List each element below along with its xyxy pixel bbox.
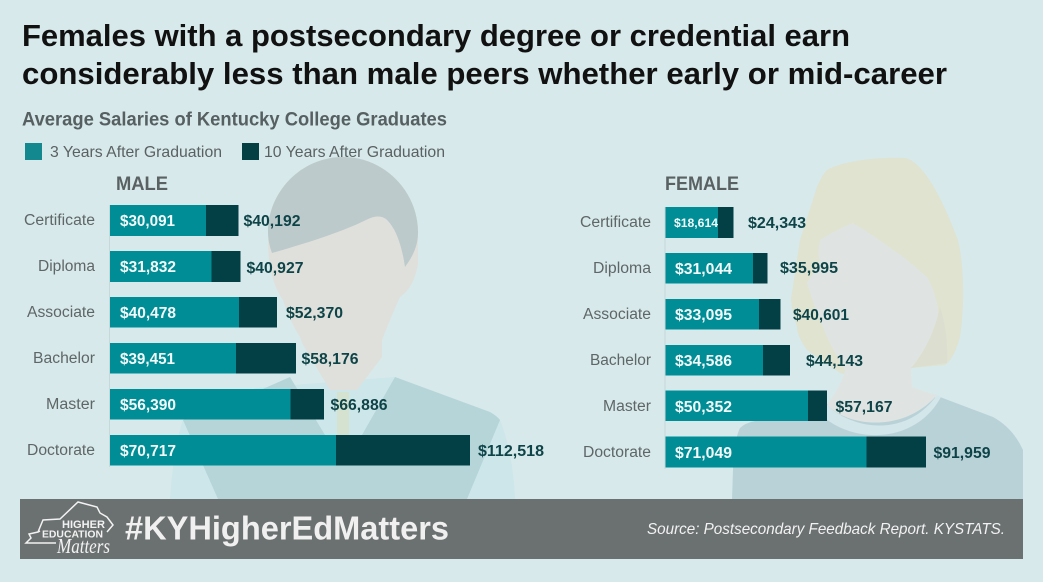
row: female doctorate: $71,049 xyxy=(675,445,732,462)
row: male associate: Associate xyxy=(27,304,95,321)
row: male diploma xyxy=(38,251,304,282)
row: male bachelor: Bachelor xyxy=(33,350,95,367)
chart subtitle: Average Salaries of Kentucky College Graduates xyxy=(22,108,447,130)
row: female bachelor: $44,143 xyxy=(806,353,863,370)
row: female bachelor: $34,586 xyxy=(675,353,732,370)
row: female bachelor xyxy=(590,345,863,376)
row: male diploma: $31,832 xyxy=(120,259,176,276)
row: female certificate: Certificate xyxy=(580,214,651,231)
row: male bachelor xyxy=(33,343,359,374)
row: male doctorate: Doctorate xyxy=(27,442,95,459)
row: male master: $56,390 xyxy=(120,397,176,414)
row: male bachelor: $39,451 xyxy=(120,351,175,368)
panel: male bar chart xyxy=(24,173,544,467)
row: male certificate: $30,091 xyxy=(120,213,175,230)
hashtag: #KYHigherEdMatters xyxy=(125,510,449,546)
row: female diploma: $31,044 xyxy=(675,261,732,278)
heading: male: MALE xyxy=(116,173,168,195)
logo: Higher Education Matters: Matters xyxy=(56,534,110,558)
row: male doctorate xyxy=(27,435,544,466)
row: female certificate: $24,343 xyxy=(748,215,806,232)
row: female diploma: $35,995 xyxy=(780,260,838,277)
row: female master: $50,352 xyxy=(675,399,732,416)
row: female certificate: $18,614 xyxy=(674,216,718,230)
row: male doctorate: $112,518 xyxy=(478,443,544,460)
row: male doctorate: $70,717 xyxy=(120,443,176,460)
row: female associate: $40,601 xyxy=(793,307,849,324)
row: female diploma xyxy=(593,253,838,284)
row: male certificate: $40,192 xyxy=(244,213,301,230)
row: male master: $66,886 xyxy=(330,397,388,414)
panel: female bar chart xyxy=(580,173,991,469)
title: considerably less than male peers whether early or mid-career xyxy=(22,56,947,91)
title: Females with a postsecondary degree or credential earn xyxy=(22,18,850,53)
row: female certificate xyxy=(580,207,806,238)
row: male associate: $40,478 xyxy=(120,305,176,322)
logo: Higher Education Matters xyxy=(26,502,113,558)
legend xyxy=(25,143,445,161)
heading: female: FEMALE xyxy=(665,173,739,195)
row: male certificate xyxy=(24,205,301,236)
row: male master xyxy=(46,389,388,420)
row: female doctorate: $91,959 xyxy=(934,445,991,462)
row: male diploma: Diploma xyxy=(38,258,95,275)
row: female doctorate xyxy=(583,436,991,468)
row: female doctorate: Doctorate xyxy=(583,444,651,461)
logo: Higher Education Matters: EDUCATION xyxy=(42,530,103,540)
illustration: male figure xyxy=(170,157,515,499)
row: female associate xyxy=(583,299,849,330)
legend: 10 Years After Graduation xyxy=(264,144,445,161)
legend: 3 Years After Graduation xyxy=(50,144,222,161)
row: male certificate: Certificate xyxy=(24,212,95,229)
row: female associate: $33,095 xyxy=(675,307,732,324)
row: male bachelor: $58,176 xyxy=(302,351,359,368)
title xyxy=(22,18,947,91)
row: female master: $57,167 xyxy=(836,399,893,416)
footer banner xyxy=(20,499,1023,559)
row: male associate: $52,370 xyxy=(286,305,343,322)
row: female diploma: Diploma xyxy=(593,260,651,277)
row: female associate: Associate xyxy=(583,306,651,323)
logo: Higher Education Matters: HIGHER xyxy=(62,519,105,531)
source note: Source: Postsecondary Feedback Report. KYSTATS. xyxy=(647,521,1005,538)
row: male associate xyxy=(27,297,343,328)
row: male master: Master xyxy=(46,396,95,413)
row: female master xyxy=(603,390,893,421)
row: female master: Master xyxy=(603,398,651,415)
row: female bachelor: Bachelor xyxy=(590,352,651,369)
row: male diploma: $40,927 xyxy=(246,260,304,277)
illustration: female figure xyxy=(732,158,1023,499)
